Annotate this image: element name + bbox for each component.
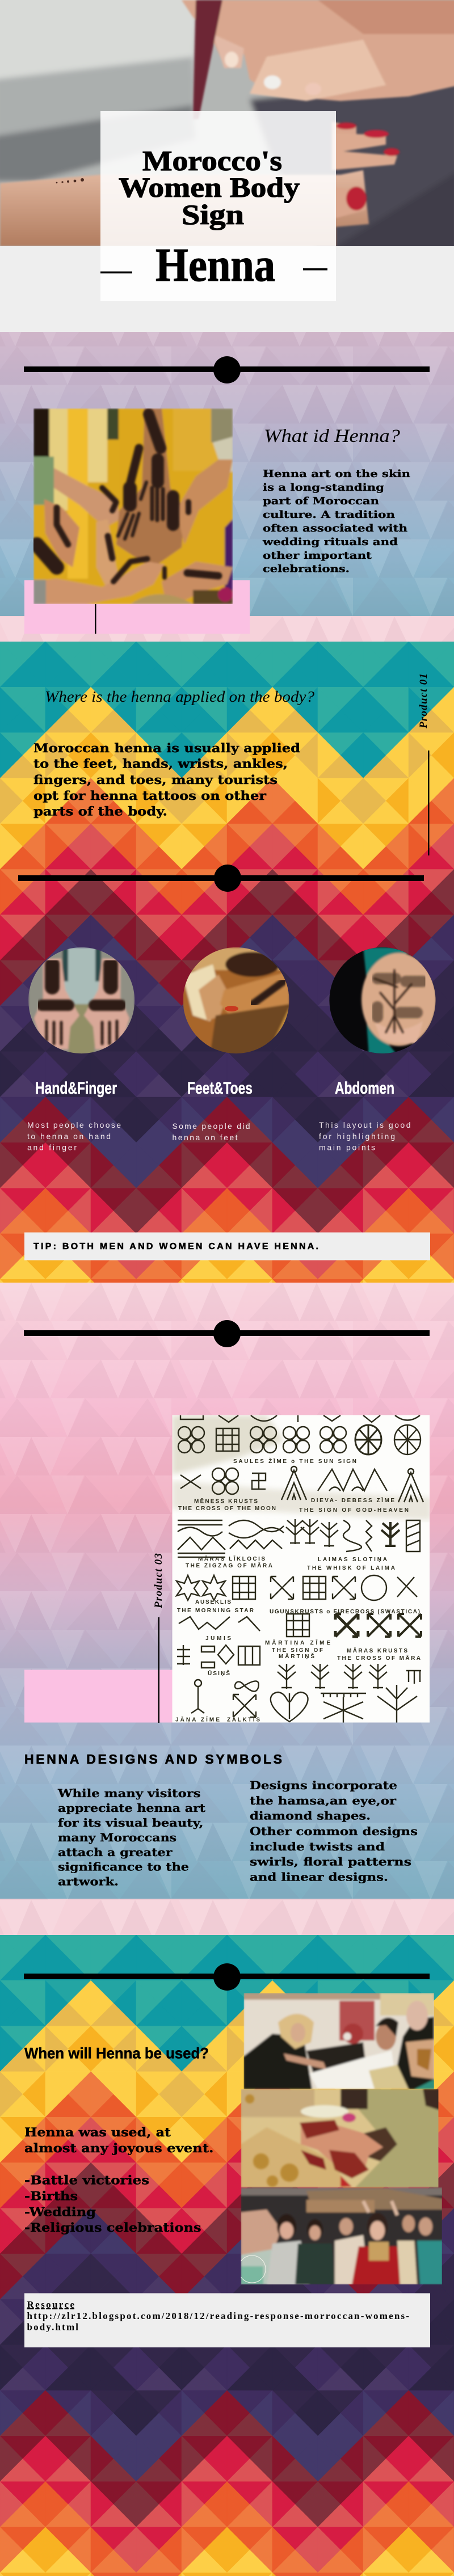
description: and finger xyxy=(27,1142,77,1152)
body text xyxy=(262,468,410,575)
vertical line xyxy=(428,751,429,855)
captions inside chart xyxy=(175,1457,421,1723)
label: Feet&Toes xyxy=(187,1079,253,1098)
photo: clasped henna hands xyxy=(241,2089,440,2188)
Henna heading with dashes xyxy=(100,239,327,292)
right body text: the hamsa,an eye,or xyxy=(250,1794,397,1807)
photo circle: foot xyxy=(183,947,289,1055)
captions inside chart: MĀRAS LĪKLOCIS xyxy=(198,1555,265,1562)
heading: Where is the henna applied on the body? xyxy=(45,688,315,705)
captions inside chart: THE ZIGZAG OF MĀRA xyxy=(186,1562,272,1569)
title text xyxy=(119,145,300,230)
captions inside chart: JĀŅA ZĪME xyxy=(175,1717,220,1723)
title text: Sign xyxy=(182,199,244,230)
body text xyxy=(33,741,300,818)
right body text: swirls, floral patterns xyxy=(250,1855,411,1869)
captions inside chart: THE WHISK OF LAIMA xyxy=(307,1565,395,1571)
right body text: include twists and xyxy=(250,1840,385,1853)
title card xyxy=(100,111,336,301)
body text: -Battle victories xyxy=(24,2173,149,2187)
left body text: artwork. xyxy=(58,1874,119,1888)
body text: -Wedding xyxy=(24,2204,96,2219)
pink backing block xyxy=(24,1670,173,1722)
description xyxy=(27,1120,121,1152)
symbols chart image xyxy=(172,1415,431,1725)
left body text: attach a greater xyxy=(58,1845,173,1859)
captions inside chart: AUSEKLIS xyxy=(195,1599,231,1605)
left body text xyxy=(57,1786,206,1888)
photo circle: belly xyxy=(329,947,436,1055)
body text: celebrations. xyxy=(263,563,350,575)
divider 4 xyxy=(24,1963,430,1991)
right body text xyxy=(250,1778,418,1883)
pastel pattern section 3 xyxy=(0,1283,454,1935)
left body text: While many visitors xyxy=(57,1786,200,1800)
body text: Moroccan henna is usually applied xyxy=(33,741,300,755)
thin black line xyxy=(95,604,96,634)
pink backing block xyxy=(24,580,250,634)
divider 1 xyxy=(24,356,430,383)
body text: culture. A tradition xyxy=(263,509,395,521)
vertical label: Product 01: Product 01 xyxy=(418,673,430,729)
captions inside chart: JUMIS xyxy=(205,1635,231,1642)
divider 2 xyxy=(18,865,424,892)
captions inside chart: THE SIGN OF GOD-HEAVEN xyxy=(299,1507,409,1513)
right body text: Designs incorporate xyxy=(250,1778,397,1792)
description: Most people choose xyxy=(27,1120,121,1129)
heading: When will Henna be used? xyxy=(24,2044,209,2061)
henna cone xyxy=(193,0,222,119)
title text: Morocco's xyxy=(142,145,282,176)
body text: fingers, and toes, many tourists xyxy=(33,773,278,787)
divider 3 xyxy=(24,1320,430,1347)
body text: opt for henna tattoos on other xyxy=(33,789,267,803)
vertical line xyxy=(158,1617,159,1723)
description: to henna on hand xyxy=(27,1132,111,1141)
photo: henna ceremony xyxy=(243,1993,435,2089)
label: Hand&Finger xyxy=(35,1079,117,1098)
photo: hands with henna over yellow dresses xyxy=(33,408,233,604)
left body text: for its visual beauty, xyxy=(58,1816,203,1829)
description: Some people did xyxy=(173,1122,250,1131)
resource heading: Resource xyxy=(27,2299,74,2310)
body text: other important xyxy=(263,550,372,562)
panel: designs and symbols xyxy=(24,1415,431,1888)
body text: almost any joyous event. xyxy=(24,2141,213,2155)
captions inside chart: LAIMAS SLOTIŅA xyxy=(318,1557,387,1563)
resource url: body.html xyxy=(27,2321,78,2333)
tip banner: TIP: BOTH MEN AND WOMEN CAN HAVE HENNA. xyxy=(33,1242,318,1251)
captions inside chart: THE MORNING STAR xyxy=(177,1608,254,1614)
upper hand xyxy=(182,0,454,101)
captions inside chart: MĒNESS KRUSTS xyxy=(194,1498,258,1504)
body text: often associated with xyxy=(263,522,407,534)
henna marks xyxy=(37,414,218,581)
resource url xyxy=(27,2311,409,2333)
body text: -Religious celebrations xyxy=(24,2220,201,2234)
description: This layout is good xyxy=(319,1120,411,1129)
column: hand and finger xyxy=(27,947,135,1152)
captions inside chart: ZALKTIS xyxy=(227,1717,260,1723)
left body text: appreciate henna art xyxy=(58,1801,206,1815)
description xyxy=(173,1122,250,1142)
captions inside chart: MĀRTIŅŠ xyxy=(279,1652,314,1660)
description xyxy=(319,1120,411,1152)
right body text: diamond shapes. xyxy=(250,1808,371,1822)
panel: when henna is used xyxy=(24,1993,443,2286)
colourful triangle pattern section 2 xyxy=(0,642,454,1325)
left body text: significance to the xyxy=(58,1860,189,1873)
vertical label: Product 03: Product 03 xyxy=(153,1553,165,1609)
captions inside chart: THE CROSS OF THE MOON xyxy=(178,1506,276,1512)
column: abdomen xyxy=(319,947,436,1152)
captions inside chart: THE SIGN OF xyxy=(272,1647,323,1654)
label: Abdomen xyxy=(335,1079,394,1098)
photo: wedding crowd xyxy=(238,2187,443,2286)
body text: wedding rituals and xyxy=(262,536,398,548)
body text: Henna art on the skin xyxy=(263,468,410,480)
panel: what is henna xyxy=(24,408,410,634)
captions inside chart: UGUNSKRUSTS o FIRECROSS (SWASTICA) xyxy=(270,1609,420,1615)
body text: -Births xyxy=(24,2189,78,2203)
resource box xyxy=(24,2293,430,2347)
right body text: and linear designs. xyxy=(250,1870,388,1883)
photo circle: hands xyxy=(28,947,135,1055)
title text: Women Body xyxy=(119,171,300,203)
colourful triangle pattern section 4 xyxy=(0,1935,454,2576)
body text: Henna was used, at xyxy=(24,2125,171,2139)
captions inside chart: MĀRAS KRUSTS xyxy=(347,1647,407,1654)
column: feet and toes xyxy=(173,947,289,1142)
right body text: Other common designs xyxy=(250,1824,418,1838)
body text: parts of the body. xyxy=(33,804,167,818)
captions inside chart: SAULES ŽĪME o THE SUN SIGN xyxy=(233,1457,356,1465)
panel: where henna is applied xyxy=(33,673,430,855)
Henna heading with dashes: Henna xyxy=(155,239,275,292)
captions inside chart: ŪSIŅŠ xyxy=(208,1669,230,1677)
pastel pattern section 1 xyxy=(0,332,454,642)
lower hand and arm xyxy=(0,170,369,246)
left body text: many Moroccans xyxy=(58,1831,176,1844)
heading: What id Henna?: What id Henna? xyxy=(264,426,401,446)
tip banner xyxy=(24,1232,430,1260)
captions inside chart: MĀRTIŅA ZĪME xyxy=(265,1639,330,1646)
heading: HENNA DESIGNS AND SYMBOLS xyxy=(24,1752,282,1766)
body text: to the feet, hands, wrists, ankles, xyxy=(33,757,288,770)
hero photo: henna being applied to a hand xyxy=(0,0,454,255)
body text: is a long-standing xyxy=(263,482,384,494)
captions inside chart: DIEVA- DEBESS ZĪME xyxy=(311,1497,394,1504)
description: main points xyxy=(319,1142,375,1152)
body text xyxy=(24,2125,213,2234)
description: for highlighting xyxy=(319,1132,395,1141)
description: henna on feet xyxy=(173,1133,238,1142)
captions inside chart: THE CROSS OF MĀRA xyxy=(337,1655,421,1662)
skin areas xyxy=(54,468,120,528)
body text: part of Moroccan xyxy=(263,495,379,507)
resource url: http://zlr12.blogspot.com/2018/12/reading-response-morroccan-womens- xyxy=(27,2311,409,2321)
